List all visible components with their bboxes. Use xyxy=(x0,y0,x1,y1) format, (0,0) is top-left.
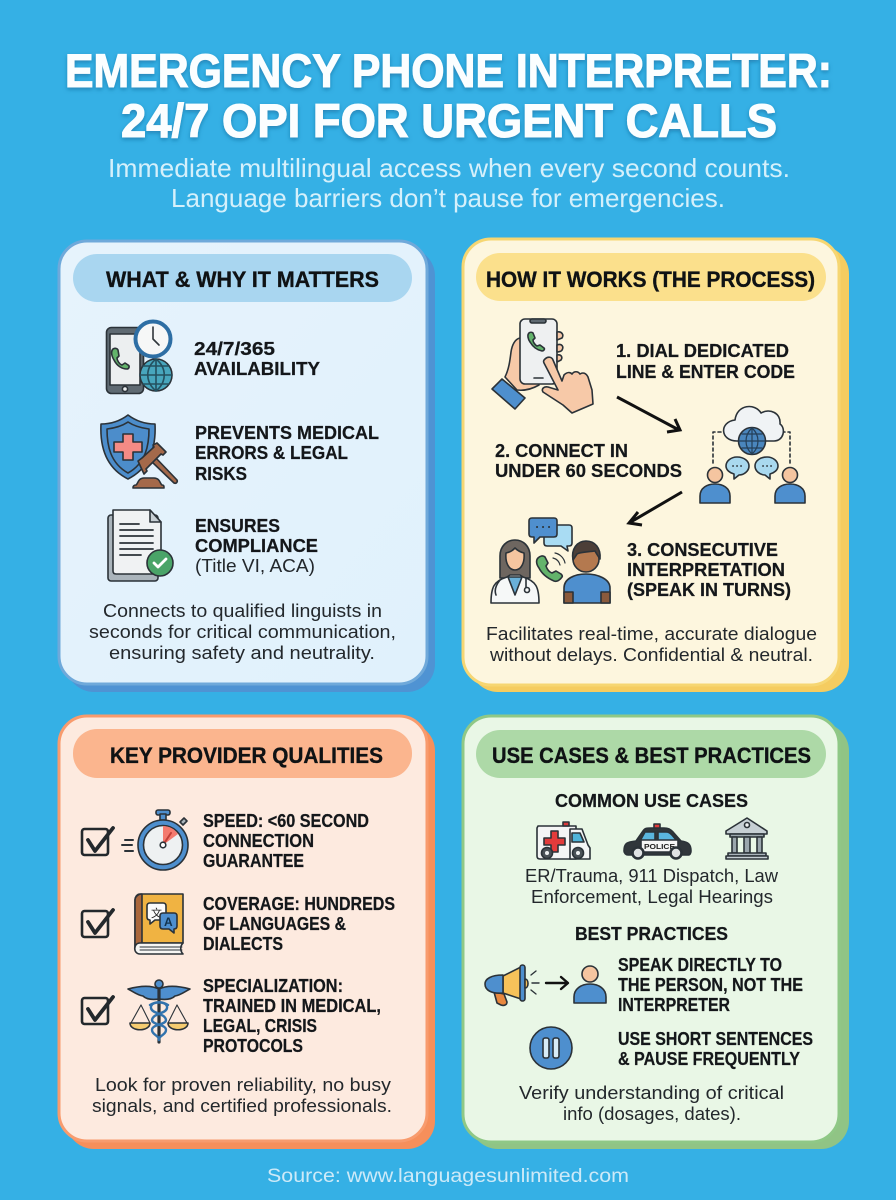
text: provider summary: Look for proven reliability, no busy xyxy=(95,1074,392,1095)
text: coverage: OF LANGUAGES & xyxy=(203,913,346,934)
text: ensures compliance xyxy=(195,515,318,576)
heading: how it works xyxy=(476,253,826,301)
text: ensures compliance: ENSURES xyxy=(195,515,280,536)
text: specialization: LEGAL, CRISIS xyxy=(203,1015,317,1036)
icon: megaphone to person xyxy=(485,965,606,1005)
text: speak directly: SPEAK DIRECTLY TO xyxy=(618,954,782,975)
text: coverage xyxy=(203,893,395,954)
icon: doctor and patient call xyxy=(491,518,610,603)
icon: stopwatch xyxy=(122,810,188,870)
icon: caduceus and scales xyxy=(128,980,190,1042)
icon: language book xyxy=(135,894,183,954)
icon: document with check xyxy=(108,510,173,581)
subtitle xyxy=(108,153,790,213)
icon: shield and gavel xyxy=(101,415,177,488)
text: what and why summary: seconds for critical communication, xyxy=(89,621,396,642)
text: how it works summary: without delays. Confidential & neutral. xyxy=(489,644,813,665)
icon: language book: 文 xyxy=(151,906,162,920)
text: specialization: PROTOCOLS xyxy=(203,1035,303,1056)
panel: how it works xyxy=(463,239,849,692)
text: use cases summary xyxy=(519,1082,784,1124)
text: provider summary: signals, and certified professionals. xyxy=(92,1095,392,1116)
text: step 2: 2. CONNECT IN xyxy=(495,440,628,461)
heading: key provider qualities: KEY PROVIDER QUALITIES xyxy=(110,743,383,768)
text: prevents errors: ERRORS & LEGAL xyxy=(195,442,348,463)
text: step 3 xyxy=(627,539,791,600)
title xyxy=(65,44,832,147)
text: what and why summary xyxy=(89,600,396,663)
icon: checkbox 2 xyxy=(82,910,113,937)
icon: police car xyxy=(624,824,691,858)
subtitle: Language barriers don’t pause for emergencies. xyxy=(171,183,725,213)
icon: language book: A xyxy=(164,915,173,929)
text: short sentences: USE SHORT SENTENCES xyxy=(618,1028,813,1049)
text: step 3: INTERPRETATION xyxy=(627,559,785,580)
heading: key provider qualities xyxy=(73,729,412,778)
text: step 3: 3. CONSECUTIVE xyxy=(627,539,778,560)
text: use cases summary: Verify understanding of critical xyxy=(519,1082,784,1103)
text: availability: 24/7/365 xyxy=(194,338,275,359)
text: how it works summary xyxy=(486,623,817,665)
text: speed: CONNECTION xyxy=(203,830,314,851)
panel: use cases and best practices xyxy=(463,716,849,1149)
text: speak directly xyxy=(618,954,803,1015)
text: what and why summary: Connects to qualified linguists in xyxy=(103,600,382,621)
icon: hand dialing phone xyxy=(492,319,593,413)
heading: what and why xyxy=(73,254,412,302)
text: specialization: TRAINED IN MEDICAL, xyxy=(203,995,381,1016)
text: what and why summary: ensuring safety and neutrality. xyxy=(109,642,375,663)
subheading: common use cases: COMMON USE CASES xyxy=(555,790,748,811)
text: prevents errors xyxy=(195,422,379,484)
subheading: best practices: BEST PRACTICES xyxy=(575,923,728,944)
text: short sentences xyxy=(618,1028,813,1069)
icon: phone clock globe xyxy=(106,322,172,394)
text: use cases list: Enforcement, Legal Hearings xyxy=(531,886,773,907)
subtitle: Immediate multilingual access when every second counts. xyxy=(108,153,790,183)
text: prevents errors: PREVENTS MEDICAL xyxy=(195,422,379,443)
panel: key provider qualities xyxy=(59,716,435,1149)
arrow: step 1 to step 2 xyxy=(617,397,680,432)
text: ensures compliance: (Title VI, ACA) xyxy=(195,555,315,576)
icon: police car: POLICE xyxy=(644,842,675,851)
icon: ambulance xyxy=(537,822,590,859)
text: speed: SPEED: <60 SECOND xyxy=(203,810,369,831)
title: EMERGENCY PHONE INTERPRETER: xyxy=(65,44,832,97)
heading: use cases: USE CASES & BEST PRACTICES xyxy=(492,743,811,768)
heading: what and why: WHAT & WHY IT MATTERS xyxy=(106,267,379,292)
text: step 1 xyxy=(616,340,795,382)
icon: pause button xyxy=(530,1027,572,1069)
text: step 1: 1. DIAL DEDICATED xyxy=(616,340,789,361)
text: availability: AVAILABILITY xyxy=(194,358,321,379)
text: speak directly: THE PERSON, NOT THE xyxy=(618,974,803,995)
arrow: step 2 to step 3 xyxy=(629,492,682,525)
panel: what and why it matters xyxy=(59,241,435,692)
icon: checkbox 1 xyxy=(82,828,113,855)
text: coverage: DIALECTS xyxy=(203,933,283,954)
title: 24/7 OPI FOR URGENT CALLS xyxy=(121,94,777,147)
heading: use cases xyxy=(476,730,826,778)
text: how it works summary: Facilitates real-time, accurate dialogue xyxy=(486,623,817,644)
text: speed: GUARANTEE xyxy=(203,850,304,871)
text: availability xyxy=(194,338,321,379)
source: Source: www.languagesunlimited.com xyxy=(267,1166,629,1187)
text: prevents errors: RISKS xyxy=(195,463,247,484)
text: use cases list xyxy=(525,865,779,907)
text: speak directly: INTERPRETER xyxy=(618,994,730,1015)
text: ensures compliance: COMPLIANCE xyxy=(195,535,318,556)
text: specialization xyxy=(203,975,381,1056)
text: step 2: UNDER 60 SECONDS xyxy=(495,460,682,481)
text: speed xyxy=(203,810,369,871)
text: short sentences: & PAUSE FREQUENTLY xyxy=(618,1048,801,1069)
text: provider summary xyxy=(92,1074,392,1116)
text: use cases list: ER/Trauma, 911 Dispatch, Law xyxy=(525,865,779,886)
icon: courthouse xyxy=(726,818,768,859)
text: step 1: LINE & ENTER CODE xyxy=(616,361,795,382)
text: specialization: SPECIALIZATION: xyxy=(203,975,343,996)
text: step 3: (SPEAK IN TURNS) xyxy=(627,579,791,600)
icon: checkbox 3 xyxy=(82,997,113,1024)
text: step 2 xyxy=(495,440,682,481)
text: use cases summary: info (dosages, dates). xyxy=(563,1103,741,1124)
icon: cloud network with people xyxy=(700,407,805,503)
heading: how it works: HOW IT WORKS (THE PROCESS) xyxy=(486,267,815,292)
text: coverage: COVERAGE: HUNDREDS xyxy=(203,893,395,914)
